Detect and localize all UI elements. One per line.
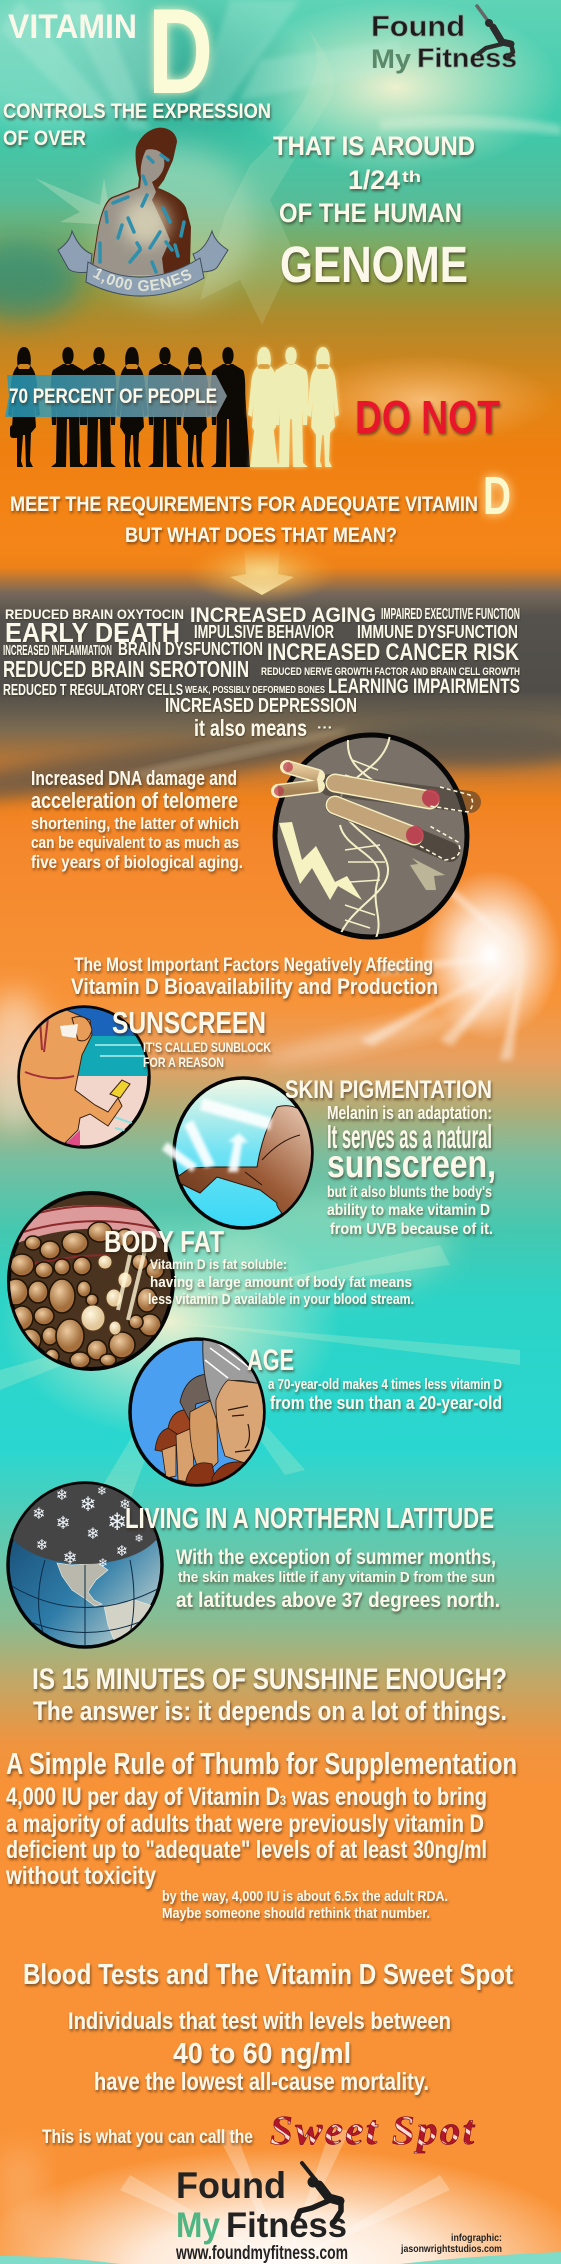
youngest face <box>155 1428 178 1452</box>
snowflakes: ❄ <box>56 1486 68 1504</box>
text: controls the expression: CONTROLS THE EXPRESSION <box>3 100 271 123</box>
snowflakes: ❄ <box>107 1508 127 1536</box>
logo bottom: Found <box>176 2165 286 2206</box>
credit: infographic: jasonwrightstudios.com <box>400 2243 502 2255</box>
text: age: from the sun than a 20-year-old <box>270 1393 502 1413</box>
text: DNA damage <box>31 768 243 872</box>
third face <box>180 1374 210 1421</box>
snowflakes: ❄ <box>80 1492 96 1516</box>
text: that is around 1/24th of the human genome: th <box>402 169 421 186</box>
section: blood tests: 40 to 60 ng/ml <box>173 2038 351 2070</box>
ribbon text: 1,000 GENES <box>92 268 192 292</box>
logo top: My <box>371 44 411 74</box>
text: northern latitude: at latitudes above 37 degrees north. <box>176 1589 500 1612</box>
text: meet the requirements: MEET THE REQUIREMENTS FOR ADEQUATE VITAMIN <box>10 493 478 516</box>
text: DNA damage: Increased DNA damage and <box>31 768 237 790</box>
text: body fat <box>104 1224 414 1308</box>
snowflakes: ❄ <box>62 1548 78 1569</box>
section: blood tests: Individuals that test with levels between <box>68 2008 451 2035</box>
text: sunscreen: FOR A REASON <box>143 1054 224 1070</box>
logo bottom: www.foundmyfitness.com <box>175 2243 348 2264</box>
effects word cloud: IMPULSIVE BEHAVIOR <box>194 622 334 642</box>
text: sweet spot: Sweet Spot <box>270 2107 476 2153</box>
section: rule of thumb: 4,000 IU per day of Vitamin D3 was enough to bring <box>6 1783 487 1811</box>
eldest face <box>202 1340 258 1420</box>
second face <box>168 1410 190 1434</box>
icon: skin pigmentation circle <box>162 1078 320 1228</box>
section: rule of thumb: without toxicity <box>5 1862 156 1890</box>
text: that is around 1/24th of the human genome: THAT IS AROUND <box>273 131 475 161</box>
text: DNA damage: five years of biological aging. <box>31 852 243 872</box>
effects word cloud: REDUCED BRAIN OXYTOCIN <box>5 606 184 622</box>
text: northern latitude: the skin makes little if any vitamin D from the sun <box>178 1569 495 1586</box>
snowflakes: ❄ <box>98 1556 108 1570</box>
logo bottom <box>175 2163 348 2264</box>
icon: yoga figure <box>477 6 513 58</box>
heading: Vitamin D: VITAMIN <box>8 8 137 46</box>
text: that is around 1/24th of the human genome <box>273 131 475 293</box>
effects word cloud: INCREASED INFLAMMATION <box>3 642 112 659</box>
text: do not: DO NOT <box>355 391 500 443</box>
logo bottom: My <box>176 2206 220 2245</box>
text: northern latitude: With the exception of summer months, <box>176 1546 496 1569</box>
silhouettes: three glowing people <box>248 347 339 467</box>
section: rule of thumb: Maybe someone should rethink that number. <box>162 1906 430 1922</box>
telomere caps <box>422 789 440 807</box>
effects word cloud: IMMUNE DYSFUNCTION <box>357 622 518 642</box>
text: skin pigmentation: but it also blunts the body's <box>327 1184 492 1201</box>
effects word cloud: REDUCED BRAIN SEROTONIN <box>3 656 249 682</box>
icon: body fat circle <box>0 1193 180 1369</box>
logo top <box>371 6 517 74</box>
text: sunscreen: SUNSCREEN <box>112 1005 266 1040</box>
text: age <box>247 1344 502 1413</box>
chromosomes <box>100 155 184 272</box>
icon: globe with snow <box>5 1482 170 1650</box>
snowflakes <box>32 1484 144 1570</box>
text: body fat: BODY FAT <box>104 1224 224 1259</box>
arrow banner: 70 percent of people: 70 PERCENT OF PEOPLE <box>9 385 217 408</box>
heading: most important factors <box>71 955 438 999</box>
text: skin pigmentation: Melanin is an adaptation: <box>327 1103 492 1123</box>
text: that is around 1/24th of the human genome: GENOME <box>280 236 468 293</box>
text: body fat: Vitamin D is fat soluble: <box>150 1256 287 1272</box>
ribbon banner <box>58 231 228 272</box>
icon: age circle <box>130 1338 265 1490</box>
snowflakes: ❄ <box>119 1497 131 1513</box>
text: northern latitude <box>125 1503 500 1612</box>
text: skin pigmentation: from UVB because of it. <box>330 1221 493 1238</box>
text: controls the expression <box>3 100 271 150</box>
heading: most important factors: Vitamin D Bioavailability and Production <box>71 974 438 999</box>
section: blood tests: have the lowest all-cause mortality. <box>94 2068 429 2096</box>
text: meet the requirements: D <box>483 466 511 526</box>
text: DNA damage: can be equivalent to as much as <box>31 833 239 852</box>
text: meet the requirements: BUT WHAT DOES THAT MEAN? <box>125 524 397 547</box>
effects word cloud: INCREASED AGING <box>190 604 376 627</box>
text: sunscreen: IT'S CALLED SUNBLOCK <box>143 1039 271 1055</box>
heading: Vitamin D <box>8 0 213 119</box>
credit: infographic: infographic: <box>451 2232 502 2244</box>
snowflakes: ❄ <box>36 1536 48 1554</box>
logo top: Found <box>371 11 465 43</box>
snowflakes: ❄ <box>116 1542 128 1560</box>
text: sunscreen <box>112 1005 271 1070</box>
effects word cloud: BRAIN DYSFUNCTION <box>118 639 263 659</box>
section: blood tests <box>23 1959 513 2148</box>
text: that is around 1/24th of the human genome: 1/24 <box>348 165 400 195</box>
silhouettes: seven dark people <box>8 347 250 467</box>
text: skin pigmentation: ability to make vitamin D <box>327 1202 490 1219</box>
text: skin pigmentation <box>285 1076 496 1238</box>
logo bottom: Fitness <box>226 2206 347 2245</box>
snowflakes: ❄ <box>55 1513 71 1534</box>
section: rule of thumb <box>5 1746 517 1922</box>
effects word cloud <box>3 604 520 741</box>
effects word cloud: WEAK, POSSIBLY DEFORMED BONES <box>185 685 325 696</box>
effects word cloud: ··· <box>317 719 333 735</box>
effects word cloud: INCREASED DEPRESSION <box>165 695 357 717</box>
text: DNA damage: acceleration of telomere <box>31 788 238 813</box>
lightning bolt <box>279 822 362 900</box>
icon: sunscreen circle <box>17 1005 151 1149</box>
chromosome arms <box>330 785 470 802</box>
section: rule of thumb: by the way, 4,000 IU is about 6.5x the adult RDA. <box>162 1889 448 1905</box>
text: body fat: having a large amount of body fat means <box>150 1274 412 1291</box>
logo top: Fitness <box>417 43 517 73</box>
text: DNA damage: shortening, the latter of which <box>31 814 239 833</box>
snowflakes: ❄ <box>86 1524 100 1543</box>
heading: most important factors: The Most Important Factors Negatively Affecting <box>74 955 433 976</box>
effects word cloud: REDUCED T REGULATORY CELLS <box>3 682 183 699</box>
snowflakes: ❄ <box>32 1504 46 1523</box>
illustration: body with 1,000 genes <box>58 128 229 297</box>
icon: DNA and chromosome circle <box>274 735 473 940</box>
text: that is around 1/24th of the human genome: OF THE HUMAN <box>279 198 462 228</box>
text: meet the requirements <box>10 466 511 547</box>
DNA helix <box>338 735 392 940</box>
text: skin pigmentation: SKIN PIGMENTATION <box>285 1076 492 1104</box>
effects word cloud: it also means <box>194 715 307 741</box>
text: age: AGE <box>247 1344 294 1377</box>
light rays <box>162 1098 272 1172</box>
arrow down <box>230 548 294 595</box>
arrow banner: 70 percent of people <box>5 375 227 417</box>
text: body fat: less vitamin D available in your blood stream. <box>148 1291 414 1308</box>
snowflakes: ❄ <box>134 1532 144 1545</box>
text: controls the expression: OF OVER <box>3 127 86 150</box>
section: blood tests: This is what you can call the <box>42 2127 253 2148</box>
effects word cloud: EARLY DEATH <box>5 617 180 648</box>
icon: yoga figure <box>297 2163 341 2222</box>
credit: infographic <box>400 2232 502 2255</box>
snowflakes: ❄ <box>97 1484 107 1498</box>
text: skin pigmentation: sunscreen, <box>327 1143 496 1186</box>
heading: 15 minutes of sunshine <box>32 1663 507 1726</box>
